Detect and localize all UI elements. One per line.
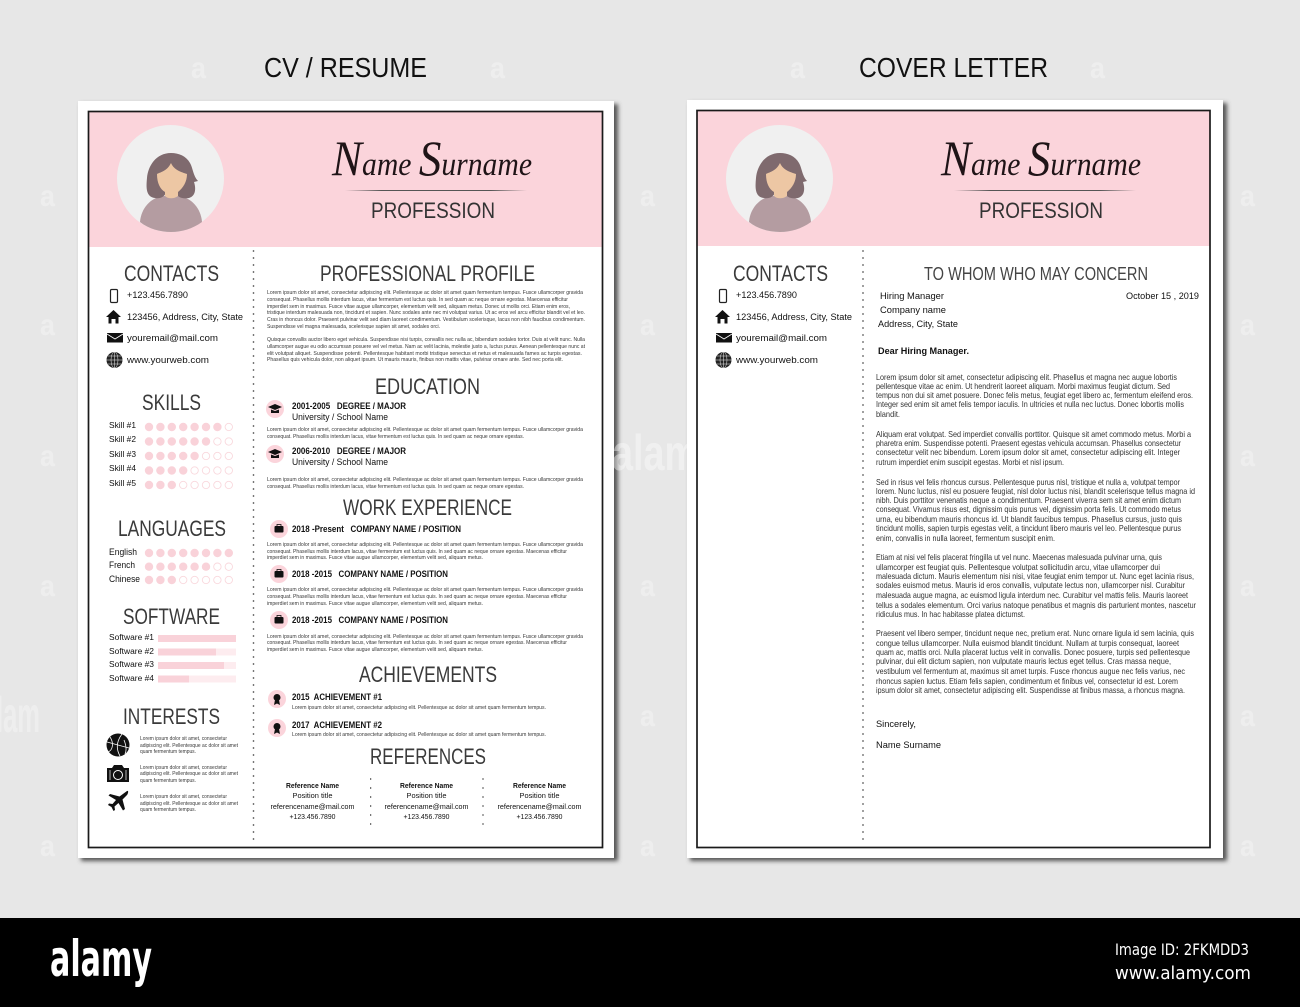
skills: Skill #2 [109,435,137,444]
sign-off [876,719,941,750]
footer band [0,918,1300,1007]
watermark marks: a [1240,309,1255,342]
letter body: tellus a sodales elementum. Orci varius natoque penatibus et magnis dis parturient montes, nascetur [876,600,1196,610]
letter body [876,372,1196,695]
work experience: Lorem ipsum dolor sit amet, consectetur adipiscing elit. Pellentesque ac dolor sit amet quam fermentum tempus. Fusce ullamcorper gravida [267,587,583,593]
letter body: quam ac, mattis orci. Nulla placerat luctus velit in convallis. Donec posuere, turpis sed pellentesque [876,647,1190,657]
achievements: 2017 ACHIEVEMENT #2 [292,720,382,730]
contacts: CONTACTS [124,261,219,286]
letter heading: TO WHOM WHO MAY CONCERN [924,264,1148,284]
work experience: Lorem ipsum dolor sit amet, consectetur adipiscing elit. Pellentesque ac dolor sit amet quam fermentum tempus. Fusce ullamcorper gravida [267,542,583,548]
work experience: consequat. Phasellus mollis interdum lacus, vitae fermentum est luctus quis. In sed quam ac neque ornare egestas. Maecenas efficitur [267,594,567,600]
divider [862,250,864,840]
software [109,604,236,683]
references: Position title [520,791,560,800]
letter body: Lorem ipsum dolor sit amet, consectetur adipiscing elit. Phasellus et magna nec augue lobortis [876,372,1177,382]
professional profile: imperdiet sem in maximus. Fusce vitae augue ullamcorper, elementum velit sed, aliquam metus. Donec ut mollis orci. Etiam enim eros, [267,304,570,310]
name: Name Surname [331,130,532,186]
watermark marks: a [40,309,55,342]
skills: Skill #5 [109,479,137,488]
professional profile [267,261,586,363]
interests: INTERESTS [123,704,220,729]
icon: mail [107,333,123,342]
letter body: urna, eu bibendum mauris rhoncus id. Ut blandit faucibus tempus. Phasellus cursus, justo quis [876,514,1182,524]
icon: globe [106,352,122,368]
interests: quam fermentum tempus. [140,749,196,755]
icon: briefcase [270,611,288,629]
references: Reference Name [400,781,453,790]
achievements: Lorem ipsum dolor sit amet, consectetur adipiscing elit. Pellentesque ac dolor sit amet quam fermentum tempus. [292,732,546,738]
image id: Image ID: 2FKMDD3 [1115,940,1249,959]
letter body: congue tellus ullamcorper. Nulla euismod blandit tincidunt. Nullam at turpis consequat, laoreet [876,638,1180,648]
letter body: Etiam at nisi vel felis placerat fringilla ut vel nunc. Maecenas malesuada pulvinar urna, quis [876,552,1162,562]
contacts: youremail@mail.com [127,333,218,343]
contacts: CONTACTS [733,261,828,286]
letter body: pharetra enim. Suspendisse potenti. Praesent egestas vehicula accumsan. Phasellus consectetur [876,438,1181,448]
recipient block: Address, City, State [878,319,958,329]
skills [109,390,232,489]
references: Reference Name [513,781,566,790]
interests [106,704,239,813]
software: Software #4 [109,674,155,683]
letter body: vestibulum vel fermentum at, maximus sit amet turpis. Fusce rhoncus augue nec felis varius, nec [876,666,1185,676]
work experience: imperdiet sem in maximus. Fusce vitae augue ullamcorper, elementum velit sed, aliquam metus. [267,647,483,653]
education: Lorem ipsum dolor sit amet, consectetur adipiscing elit. Pellentesque ac dolor sit amet quam fermentum tempus. Fusce ullamcorper gravida [267,477,583,483]
icon: home [715,310,730,324]
footer logo: alamy [50,930,152,988]
languages: French [109,560,135,570]
letter body: Sed in risus vel felis rhoncus cursus. Pellentesque purus nisl, tristique et nulla a, volutpat tempor [876,477,1180,487]
education: Lorem ipsum dolor sit amet, consectetur adipiscing elit. Pellentesque ac dolor sit amet quam fermentum tempus. Fusce ullamcorper gravida [267,427,583,433]
interests: quam fermentum tempus. [140,807,196,813]
watermark marks: a [1240,570,1255,603]
contacts: www.yourweb.com [126,355,209,365]
large watermark: alam [612,425,698,481]
education [266,374,583,490]
letter body: malesuada dictum. Mauris elementum nisi nisi, vitae feugiat enim tempor ut. Nunc eget lacinia risus, [876,571,1194,581]
icon: award [268,690,286,708]
education: consequat. Phasellus mollis interdum lacus, vitae fermentum est luctus quis. In sed quam ac neque ornare egestas. [267,484,524,490]
sign-off: Sincerely, [876,719,916,729]
work experience: consequat. Phasellus mollis interdum lacus, vitae fermentum est luctus quis. In sed quam ac neque ornare egestas. Maecenas efficitur [267,640,567,646]
contacts: +123.456.7890 [736,290,797,300]
watermark marks: a [640,180,655,213]
software: Software #1 [109,633,155,642]
work experience: Lorem ipsum dolor sit amet, consectetur adipiscing elit. Pellentesque ac dolor sit amet quam fermentum tempus. Fusce ullamcorper gravida [267,634,583,640]
work experience: 2018 -2015 COMPANY NAME / POSITION [292,569,448,579]
education: EDUCATION [375,374,480,399]
watermark marks: a [1240,180,1255,213]
letter body: sodales euismod metus. Mauris id eros convallis, vulputate lectus non, ullamcorper nisl. Curabitur [876,580,1185,590]
interests: adipiscing elit. Pellentesque ac dolor sit amet [140,771,239,777]
references: referencename@mail.com [270,802,354,811]
work experience: WORK EXPERIENCE [343,495,512,520]
work experience: consequat. Phasellus mollis interdum lacus, vitae fermentum est luctus quis. In sed quam ac neque ornare egestas. Maecenas efficitur [267,549,567,555]
recipient block [878,291,958,329]
references: +123.456.7890 [290,812,336,821]
interests: adipiscing elit. Pellentesque ac dolor sit amet [140,743,239,749]
education: 2006-2010 DEGREE / MAJOR [292,446,406,456]
contacts: 123456, Address, City, State [736,312,852,322]
sign-off: Name Surname [876,740,941,750]
work experience [267,495,583,653]
watermark marks: a [640,309,655,342]
website: www.alamy.com [1115,963,1251,984]
education: University / School Name [292,412,388,422]
letter body: Praesent vel libero semper, tincidunt neque nec, pretium erat. Nunc ornare ligula id sem lacinia, quis [876,628,1194,638]
letter body: tempus non dui sit amet posuere. Donec felis metus, feugiat eget libero ac, fermentum eleifend eros. [876,390,1193,400]
skills: SKILLS [142,390,201,415]
date: October 15 , 2019 [1126,291,1199,301]
work experience: imperdiet sem in maximus. Fusce vitae augue ullamcorper, elementum velit sed, aliquam metus. [267,601,483,607]
letter body: pellentesque vitae ac enim. Ut hendrerit laoreet aliquam. Morbi maximus feugiat dictum. Sed [876,381,1170,391]
professional profile: Phasellus quis vehicula dolor, non aliquet ipsum. Ut mauris mauris, finibus non mattis vitae, pulvinar ornare ante. Sed nec porta elit. [267,357,563,363]
interests: adipiscing elit. Pellentesque ac dolor sit amet [140,801,239,807]
avatar [117,125,224,232]
icon: briefcase [270,520,288,538]
icon: graduation cap [266,445,284,463]
letter body: consectetur velit nec bibendum. Lorem ipsum dolor sit amet, consectetur adipiscing elit. Integer [876,447,1180,457]
references: REFERENCES [370,744,486,769]
languages: English [109,547,137,557]
letter body: ipsum dolor sit amet, consectetur adipiscing elit. Suspendisse at finibus massa, a rhoncus magna. [876,685,1185,695]
watermark marks: a [1240,700,1255,733]
letter body: ridiculus mus. In hac habitasse platea dictumst. [876,609,1025,619]
watermark marks: a [1240,830,1255,863]
education: 2001-2005 DEGREE / MAJOR [292,401,406,411]
letter body: lorem. Nunc luctus, nisl eu posuere feugiat, nisl dolor luctus nisi, blandit scelerisque tellus magna id [876,486,1195,496]
letter body: Aliquam erat volutpat. Sed imperdiet convallis porttitor. Quisque sit amet commodo metus. Morbi a [876,429,1191,439]
references: +123.456.7890 [404,812,450,821]
contacts [106,261,243,368]
references: Position title [292,791,332,800]
icon: basketball [106,734,130,756]
watermark marks: a [40,440,55,473]
watermark marks: a [1240,440,1255,473]
watermark marks: a [1090,52,1105,85]
title: CV / Resume: CV / RESUME [264,52,427,83]
interests: Lorem ipsum dolor sit amet, consectetur [140,765,227,771]
references: Position title [406,791,446,800]
letter body: rhoncus sapien luctus. Etiam felis sapien, condimentum et finibus vel, consectetur id est. Lorem [876,676,1178,686]
letter body: pulvinar, dui elit dictum sapien, non vulputate mauris lectus eget tellus. Cras massa neque, [876,656,1171,666]
letter body: ullamcorper est feugiat quis. Pellentesque volutpat sollicitudin arcu, vitae ullamcorper dui [876,562,1160,572]
interests: Lorem ipsum dolor sit amet, consectetur [140,794,227,800]
watermark marks [0,52,1255,863]
references: referencename@mail.com [498,802,582,811]
languages: Chinese [109,574,140,584]
software: Software #2 [109,647,155,656]
references [270,744,582,832]
achievements [268,662,546,738]
salutation: Dear Hiring Manager. [878,346,969,356]
icon: mail [716,333,732,342]
software: SOFTWARE [123,604,220,629]
references: +123.456.7890 [516,812,562,821]
professional profile: elit volutpat aliquet. Suspendisse potenti. Pellentesque habitant morbi tristique senectus et netus et malesuada fames ac turpis egestas. [267,351,582,357]
icon: briefcase [270,565,288,583]
profession: PROFESSION [979,198,1103,223]
professional profile: tristique interdum malesuada non, tincidunt et sapien. Nunc sodales ante nec mi volutpat varius. Ut ac eros vel arcu efficitur blandit vel et leo. [267,310,585,316]
professional profile: Cras in rhoncus dolor. Praesent pulvinar velit sed diam laoreet condimentum. Vestibulum scelerisque, lacus non nibh faucibus condimentum. [267,317,585,323]
skills: Skill #3 [109,450,137,459]
watermark marks: a [40,180,55,213]
icon: globe [716,352,732,368]
interests: quam fermentum tempus. [140,778,196,784]
watermark marks: a [490,52,505,85]
contacts: 123456, Address, City, State [127,312,243,322]
icon: phone [110,290,118,302]
icon: camera [107,765,129,782]
skills: Skill #4 [109,464,137,473]
watermark marks: a [191,52,206,85]
recipient block: Hiring Manager [880,291,944,301]
skills: Skill #1 [109,421,137,430]
icon: award [268,719,286,737]
contacts: +123.456.7890 [127,290,188,300]
professional profile: Lorem ipsum dolor sit amet, consectetur adipiscing elit. Pellentesque ac dolor sit amet quam fermentum tempus. Fusce ullamcorper gravida [267,290,583,296]
letter body: nibh. Duis porttitor venenatis neque a condimentum. Praesent viverra sem sit amet enim dictum [876,495,1181,505]
references: Reference Name [286,781,339,790]
letter body: blandit. [876,409,900,419]
interests: Lorem ipsum dolor sit amet, consectetur [140,736,227,742]
contacts: www.yourweb.com [735,355,818,365]
panel: cover letter page [687,100,1227,861]
watermark marks: a [640,700,655,733]
icon: airplane [108,791,128,811]
panel: CV page [78,101,618,861]
name: Name Surname [940,130,1141,186]
watermark marks: a [40,830,55,863]
letter body: malesuada augue magna, ac euismod ligula interdum nec. Curabitur vel mattis felis. Mauris laoreet [876,590,1189,600]
icon: phone [720,290,726,302]
divider [252,250,254,840]
watermark marks: a [640,830,655,863]
education: University / School Name [292,457,388,467]
contacts [715,261,852,368]
profession: PROFESSION [371,198,495,223]
watermark marks: a [40,570,55,603]
languages [109,516,233,584]
work experience: imperdiet sem in maximus. Fusce vitae augue ullamcorper, elementum velit sed, aliquam metus. [267,555,483,561]
avatar [726,125,833,232]
letter body: tincidunt mollis, sapien turpis egestas velit, a tincidunt libero mauris vel leo. Pellentesque purus [876,523,1181,533]
contacts: youremail@mail.com [736,333,827,343]
work experience: 2018 -2015 COMPANY NAME / POSITION [292,615,448,625]
professional profile: ullamcorper augue eu odio accumsan posuere vel vel metus. Nam ac velit lacinia, molestie justo a, luctus purus. Aenean pellentesque nunc at [267,344,586,350]
achievements: ACHIEVEMENTS [359,662,497,687]
achievements: Lorem ipsum dolor sit amet, consectetur adipiscing elit. Pellentesque ac dolor sit amet quam fermentum tempus. [292,705,546,711]
recipient block: Company name [880,305,946,315]
title: Cover Letter: COVER LETTER [859,52,1048,83]
letter body: Integer sed enim sit amet felis tempor iaculis. In ultricies et nulla nec luctus. Donec lobortis mollis [876,399,1184,409]
references: referencename@mail.com [384,802,468,811]
icon: graduation cap [266,400,284,418]
watermark marks: a [790,52,805,85]
letter body: enim, convallis in nulla laoreet, fermentum suscipit enim. [876,533,1055,543]
software: Software #3 [109,660,155,669]
professional profile: consequat. Phasellus mollis interdum lacus, vitae fermentum est luctus quis. In sed quam ac neque ornare egestas. Maecenas efficitur [267,297,568,303]
achievements: 2015 ACHIEVEMENT #1 [292,692,382,702]
education: consequat. Phasellus mollis interdum lacus, vitae fermentum est luctus quis. In sed quam ac neque ornare egestas. [267,434,524,440]
letter body: rutrum imperdiet enim suscipit egestas. Morbi et nisl ipsum. [876,457,1064,467]
icon: home [106,310,121,324]
letter body: consequat. Vivamus risus est, dignissim quis purus vel, dignissim porta felis. Ut commodo metus [876,504,1181,514]
professional profile: Quisque convallis auctor libero eget vehicula. Suspendisse nisi turpis, convallis nec nulla ac, bibendum sodales tortor. Duis at velit nunc. Nulla [267,337,585,343]
work experience: 2018 -Present COMPANY NAME / POSITION [292,524,461,534]
languages: LANGUAGES [118,516,226,541]
watermark marks: a [640,570,655,603]
professional profile: Suspendisse vel magna malesuada, scelerisque sapien sit amet, sodales orci. [267,324,440,330]
professional profile: PROFESSIONAL PROFILE [320,261,535,286]
